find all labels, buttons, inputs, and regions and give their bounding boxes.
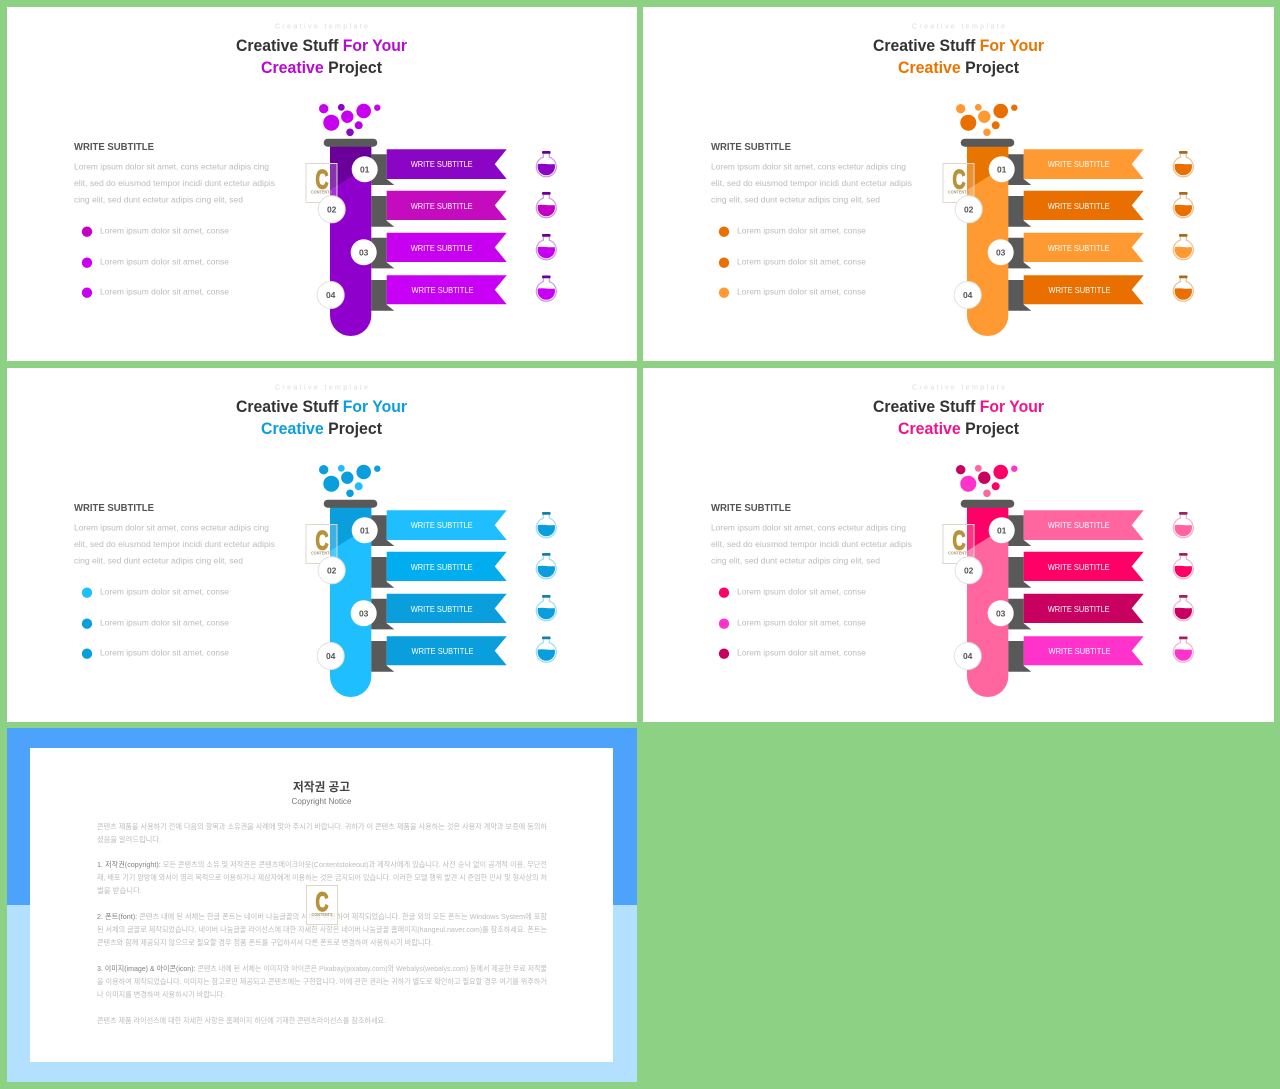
bullet list: Lorem ipsum dolor sit amet, conse (100, 226, 229, 236)
bullet list: Lorem ipsum dolor sit amet, conse (737, 618, 866, 628)
notice footer line: 콘텐츠 제품 라이선스에 대한 자세한 사항은 홈페이지 하단에 기재한 콘텐츠라이선스를 참조하세요. (97, 1015, 386, 1025)
title (236, 37, 408, 77)
number badges: 04 (326, 290, 336, 300)
bullet list: Lorem ipsum dolor sit amet, conse (737, 286, 866, 296)
title: Creative Project (261, 59, 382, 77)
connectors (1008, 154, 1031, 311)
number badges: 04 (963, 651, 973, 661)
number badges: 03 (996, 247, 1006, 257)
ribbon 4 (1024, 636, 1144, 665)
panel: blue slide (7, 368, 637, 722)
ribbon 1: WRITE SUBTITLE (1048, 159, 1110, 169)
logo watermark: CONTENTS (948, 550, 969, 556)
number badges (954, 517, 1015, 670)
notice section 2 (97, 911, 547, 947)
number badges: 03 (996, 608, 1006, 618)
ribbon 3: WRITE SUBTITLE (1048, 604, 1110, 614)
ribbon 2 (1024, 552, 1144, 581)
bullet list (719, 226, 866, 298)
logo watermark: C (952, 164, 966, 194)
text block: cing elit, sed dunt ectetur adipis cing elit, sed (74, 194, 243, 204)
logo watermark: C (316, 526, 328, 556)
notice heading: 저작권 공고 (293, 779, 350, 794)
text block: Lorem ipsum dolor sit amet, cons ectetur adipis cing (711, 162, 906, 172)
subtitle: WRITE SUBTITLE (711, 141, 791, 153)
notice intro (97, 821, 547, 844)
number badges (317, 517, 378, 670)
number badges: 03 (359, 608, 369, 618)
bullet list: Lorem ipsum dolor sit amet, conse (100, 286, 229, 296)
text block: Lorem ipsum dolor sit amet, cons ectetur adipis cing (74, 162, 269, 172)
ribbon 4: WRITE SUBTITLE (1048, 285, 1111, 295)
ribbon 4 (387, 636, 507, 665)
notice section 2: 콘텐츠와 함께 제공되지 않으므로 필요할 경우 정품 폰트를 구입하셔서 다른 폰트로 변경하여 사용하시기 바랍니다. (97, 937, 433, 947)
ribbon 4 (387, 275, 507, 304)
logo watermark: CONTENTS (312, 912, 332, 917)
text block: elit, sed do eiusmod tempor incidi dunt ectetur adipis (711, 178, 912, 188)
icon: bubbles (956, 465, 1018, 497)
test tube (961, 500, 1014, 697)
text block: cing elit, sed dunt ectetur adipis cing elit, sed (711, 194, 880, 204)
panel: purple slide (7, 7, 637, 361)
notice section 2: 된 서체의 글꼴로 제작되었습니다. 네이버 나눔글꼴 라이선스에 대한 자세한 사항은 네이버 나눔글꼴 홈페이지(hangeul.naver.com)를 참조하세요. 폰트는 (97, 924, 547, 934)
icon: bubbles (319, 465, 380, 497)
number badges: 04 (326, 651, 336, 661)
ribbon 2: WRITE SUBTITLE (411, 562, 473, 572)
connectors (371, 515, 394, 672)
number badges (954, 156, 1015, 308)
number badges: 01 (360, 164, 370, 174)
ribbon 2: WRITE SUBTITLE (411, 201, 473, 211)
bullet list: Lorem ipsum dolor sit amet, conse (737, 226, 866, 236)
number badges: 02 (327, 204, 337, 214)
logo watermark: CONTENTS (311, 190, 332, 194)
text block: cing elit, sed dunt ectetur adipis cing elit, sed (74, 556, 243, 566)
bullet list: Lorem ipsum dolor sit amet, conse (100, 648, 229, 658)
text block (711, 522, 912, 566)
icons: flasks (1173, 512, 1193, 662)
bullet list (82, 586, 229, 659)
ribbon 1 (387, 510, 507, 540)
notice section 1: 재, 배포 기기 양방에 와서이 영리 목적으로 이용하거나 제삼자에게 이용하는 것은 금지되어 있습니다. 이러한 모델 행위 발견 시 준엄한 민사 및 형사상의 처 (97, 872, 547, 882)
bullet list: Lorem ipsum dolor sit amet, conse (100, 618, 229, 628)
text block (711, 162, 912, 204)
title: Creative Stuff For Your (236, 398, 408, 416)
logo watermark: C (316, 164, 328, 194)
notice section 3: 3. 이미지(image) & 아이콘(icon): 콘텐츠 내에 된 서체는 이미지와 아이콘은 Pixabay(pixabay.com)와 Webalys(webalys.com) 등에서 제공한 무료 저작물 (97, 963, 547, 973)
panel: pink slide (643, 368, 1274, 722)
ribbon 1 (1024, 149, 1144, 179)
text block: Lorem ipsum dolor sit amet, cons ectetur adipis cing (74, 522, 269, 532)
title: Creative Stuff For Your (873, 398, 1045, 416)
title (236, 398, 408, 438)
logo watermark (943, 524, 974, 564)
logo watermark (306, 886, 338, 924)
logo watermark (943, 164, 974, 202)
number badges: 01 (997, 525, 1007, 535)
logo watermark: CONTENTS (948, 190, 969, 194)
icons: flasks (536, 151, 556, 301)
notice section 3: 을 이용하여 제작되었습니다. 이미지는 참고로만 제공되고 콘텐츠에는 구현합니다. 이에 관한 권리는 귀하가 별도로 확인하고 필요할 경우 여기를 위주하거 (97, 976, 547, 986)
subtitle: WRITE SUBTITLE (74, 141, 154, 153)
notice subheading: Copyright Notice (292, 797, 352, 806)
icon: bubbles (956, 104, 1018, 136)
test tube (961, 139, 1014, 336)
text block: elit, sed do eiusmod tempor incidi dunt ectetur adipis (74, 178, 275, 188)
icon: bubbles (319, 104, 380, 136)
logo watermark: CONTENTS (311, 550, 332, 556)
ribbon 4: WRITE SUBTITLE (412, 285, 474, 295)
ribbon 2 (1024, 191, 1144, 220)
bullet list: Lorem ipsum dolor sit amet, conse (737, 256, 866, 266)
ribbon 1: WRITE SUBTITLE (411, 520, 473, 530)
number badges: 01 (997, 164, 1007, 174)
notice intro: 셨음을 알려드립니다. (97, 834, 161, 844)
title (873, 398, 1045, 438)
bullet list (82, 226, 229, 298)
ribbon 4: WRITE SUBTITLE (1048, 646, 1111, 656)
number badges: 02 (964, 565, 974, 575)
number badges: 01 (360, 525, 370, 535)
panel: copyright notice (7, 728, 637, 1082)
subtitle: WRITE SUBTITLE (711, 502, 791, 514)
notice section 1: 1. 저작권(copyright): 모든 콘텐츠의 소유 및 저작권은 콘텐츠메이크아웃(Contentstokeout)과 제작사에게 있습니다. 사전 승낙 없이 공개적 이용, 무단전 (97, 859, 547, 869)
ribbon 1 (387, 149, 507, 179)
icons: flasks (1173, 151, 1193, 301)
tagline: Creative template (275, 384, 368, 392)
logo watermark: C (952, 526, 966, 556)
subtitle: WRITE SUBTITLE (74, 502, 154, 514)
title: Creative Stuff For Your (236, 37, 408, 55)
number badges: 02 (964, 204, 974, 214)
text block: elit, sed do eiusmod tempor incidi dunt ectetur adipis (711, 539, 912, 549)
text block: cing elit, sed dunt ectetur adipis cing elit, sed (711, 556, 880, 566)
title: Creative Stuff For Your (873, 37, 1045, 55)
connectors (1008, 515, 1031, 672)
bullet list: Lorem ipsum dolor sit amet, conse (100, 256, 229, 266)
ribbon 3 (1024, 594, 1144, 623)
bullet list: Lorem ipsum dolor sit amet, conse (737, 586, 866, 596)
panel: orange slide (643, 7, 1274, 361)
ribbon 2 (387, 552, 507, 581)
notice section 1: 벌을 받습니다. (97, 885, 142, 895)
tagline: Creative template (275, 24, 368, 30)
bullet list: Lorem ipsum dolor sit amet, conse (737, 648, 866, 658)
logo watermark (306, 164, 337, 202)
text block (74, 522, 275, 566)
ribbon 3 (387, 594, 507, 623)
logo watermark (306, 524, 337, 564)
ribbon 1: WRITE SUBTITLE (1048, 520, 1110, 530)
number badges (317, 156, 378, 308)
icons: flasks (536, 512, 556, 662)
number badges: 04 (963, 290, 973, 300)
text block: elit, sed do eiusmod tempor incidi dunt ectetur adipis (74, 539, 275, 549)
ribbon 3 (387, 233, 507, 262)
ribbon 2 (387, 191, 507, 220)
tagline: Creative template (912, 384, 1005, 392)
title: Creative Project (898, 59, 1019, 77)
number badges: 03 (359, 247, 369, 257)
bullet list: Lorem ipsum dolor sit amet, conse (100, 586, 229, 596)
ribbon 3: WRITE SUBTITLE (1048, 243, 1110, 253)
tagline: Creative template (912, 24, 1005, 30)
ribbon 2: WRITE SUBTITLE (1048, 201, 1110, 211)
title: Creative Project (261, 420, 382, 438)
notice section 3: 나 이미지를 변경하여 사용하시기 바랍니다. (97, 989, 225, 999)
ribbon 3: WRITE SUBTITLE (411, 243, 473, 253)
ribbon 2: WRITE SUBTITLE (1048, 562, 1110, 572)
ribbon 3 (1024, 233, 1144, 262)
ribbon 4: WRITE SUBTITLE (412, 646, 474, 656)
bullet list (719, 586, 866, 659)
ribbon 1: WRITE SUBTITLE (411, 159, 473, 169)
number badges: 02 (327, 565, 337, 575)
notice section 2: 2. 폰트(font): 콘텐츠 내에 된 서체는 한글 폰트는 네이버 나눔글꼴의 서체를 사용하여 제작되었습니다. 한글 외의 모든 폰트는 Windows System에 포함 (97, 911, 547, 921)
ribbon 4 (1024, 275, 1144, 304)
notice section 3 (97, 963, 547, 999)
notice section 1 (97, 859, 547, 895)
ribbon 3: WRITE SUBTITLE (411, 604, 473, 614)
test tube (324, 500, 377, 697)
title (873, 37, 1045, 77)
logo watermark: C (316, 887, 328, 917)
notice intro: 콘텐츠 제품을 사용하기 전에 다음의 항목과 소유권을 사례에 맞아 주시기 바랍니다. 귀하가 이 콘텐츠 제품을 사용하는 것은 사용자 계약과 보증에 동의하 (97, 821, 547, 831)
connectors (371, 154, 394, 311)
test tube (324, 139, 377, 336)
text block: Lorem ipsum dolor sit amet, cons ectetur adipis cing (711, 522, 906, 532)
ribbon 1 (1024, 510, 1144, 540)
text block (74, 162, 275, 204)
title: Creative Project (898, 420, 1019, 438)
